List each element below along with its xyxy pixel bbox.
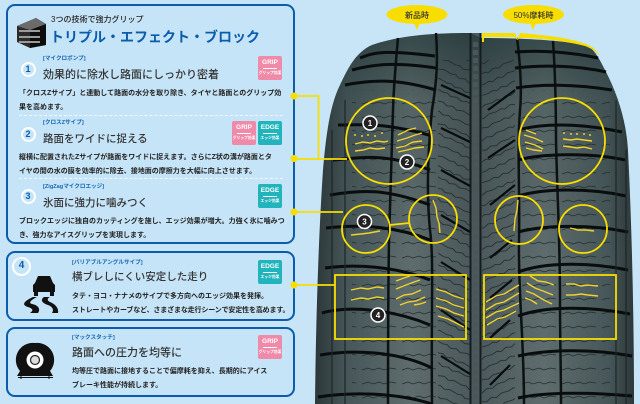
- marker 1: 1: [368, 119, 373, 128]
- tire body: [315, 33, 634, 404]
- item 4 body: [72, 292, 289, 314]
- callout: new tire: [386, 5, 448, 30]
- item 3 label: [ZigZagマイクロエッジ]: [43, 184, 104, 190]
- item 2 badge edge: エッジ効果: [260, 136, 279, 140]
- panel: triple effect block: [6, 4, 295, 244]
- callout: 50% worn: [503, 5, 564, 30]
- item 3 badge edge: EDGE: [261, 187, 279, 194]
- item 2 body: [19, 152, 272, 175]
- marker 2: 2: [405, 158, 410, 167]
- item 5 title: 路面への圧力を均等に: [72, 346, 182, 358]
- marker 4: [371, 308, 385, 322]
- item 2 label: [クロスZサイプ]: [43, 120, 84, 126]
- item 4 badge edge: エッジ効果: [260, 275, 279, 279]
- item 4 label: [バリアブルアングルサイプ]: [72, 260, 143, 266]
- item 5 badge grip: [258, 335, 282, 359]
- item 4 number: 4: [19, 260, 24, 271]
- item 2 title: 路面をワイドに捉える: [43, 132, 148, 144]
- item 1 number: 1: [25, 64, 30, 74]
- item 4 badge edge: EDGE: [261, 263, 279, 270]
- item 1 badge grip: グリップ効果: [259, 71, 281, 75]
- item 2 badge grip: [232, 121, 256, 145]
- item 5 body: 均等圧で路面に接地することで偏摩耗を抑え、長期的にアイス: [72, 368, 267, 375]
- item 4 title: 横ブレしにくい安定した走り: [72, 271, 208, 283]
- item 3 body: き、強力なアイスグリップを実現します。: [19, 232, 150, 238]
- item 2 number: 2: [25, 128, 30, 138]
- item 4 body: ストレートやカーブなど、さまざまな走行シーンで安定性を高めます。: [72, 307, 289, 314]
- item 1 title: 効果的に除水し路面にしっかり密着: [43, 68, 219, 80]
- marker 2: [400, 155, 414, 169]
- item 5 badge grip: GRIP: [262, 338, 278, 345]
- item 4 number: [12, 257, 31, 276]
- item 3 number: 3: [25, 190, 30, 200]
- item 1 badge grip: [258, 56, 282, 80]
- item 4 badge edge: [258, 260, 282, 284]
- yellow sipe highlights: [351, 128, 598, 327]
- callout: new tire: 新品時: [405, 10, 429, 20]
- marker 4: 4: [376, 311, 381, 320]
- item 2 number: [20, 126, 36, 142]
- item 2 body: 縦横に配置されたZサイプが路面をワイドに捉えます。さらにZ状の溝が路面とタ: [19, 154, 272, 161]
- item 1 badge grip: GRIP: [262, 59, 278, 66]
- marker 3: 3: [362, 218, 367, 226]
- panel: max touch: [6, 327, 295, 397]
- callout: 50% worn: 50%摩耗時: [513, 10, 554, 20]
- item 3 title: 氷面に強力に噛みつく: [43, 196, 148, 208]
- highlight circles: [342, 98, 607, 253]
- item 3 body: [19, 216, 285, 238]
- item 5 body: [72, 366, 267, 389]
- panel: variable angle sipe: [6, 251, 295, 321]
- item 5 body: ブレーキ性能が持続します。: [72, 382, 162, 389]
- item 1 body: [19, 88, 281, 110]
- connector lines: [294, 96, 409, 285]
- item 2 badge edge: [258, 121, 282, 145]
- item 3 body: ブロックエッジに独自のカッティングを施し、エッジ効果が増大。力強く氷に噛みつ: [19, 218, 285, 225]
- marker 3: [358, 214, 372, 228]
- item 1 body: 果を高めます。: [19, 104, 67, 110]
- worn profile highlight: [482, 33, 600, 56]
- item 3 badge edge: エッジ効果: [260, 199, 279, 203]
- item 5 badge grip: グリップ効果: [259, 350, 281, 354]
- item 3 number: [20, 188, 36, 204]
- highlight rectangles: [335, 275, 616, 339]
- connector dots: [290, 92, 298, 288]
- item 1 number: [20, 62, 36, 76]
- item 5 label: [マックスタッチ]: [72, 335, 115, 341]
- item 2 badge edge: EDGE: [261, 124, 279, 131]
- marker 1: [363, 116, 377, 130]
- item 1 label: [マイクロポンプ]: [43, 56, 86, 62]
- item 2 badge grip: GRIP: [236, 124, 252, 131]
- heading: main title: トリプル・エフェクト・ブロック: [50, 29, 260, 45]
- item 4 body: タテ・ヨコ・ナナメのサイプで多方向へのエッジ効果を発揮。: [72, 293, 268, 300]
- item 2 body: イヤの間の水の膜を効率的に除去、接地面の摩擦力を大幅に向上させます。: [19, 168, 256, 175]
- item 3 badge edge: [258, 184, 282, 208]
- heading: small lead: 3つの技術で強力グリップ: [51, 15, 143, 24]
- item 1 body: 「クロスZサイプ」と連動して路面の水分を取り除き、タイヤと路面とのグリップ効: [19, 90, 281, 97]
- item 2 badge grip: グリップ効果: [233, 136, 255, 140]
